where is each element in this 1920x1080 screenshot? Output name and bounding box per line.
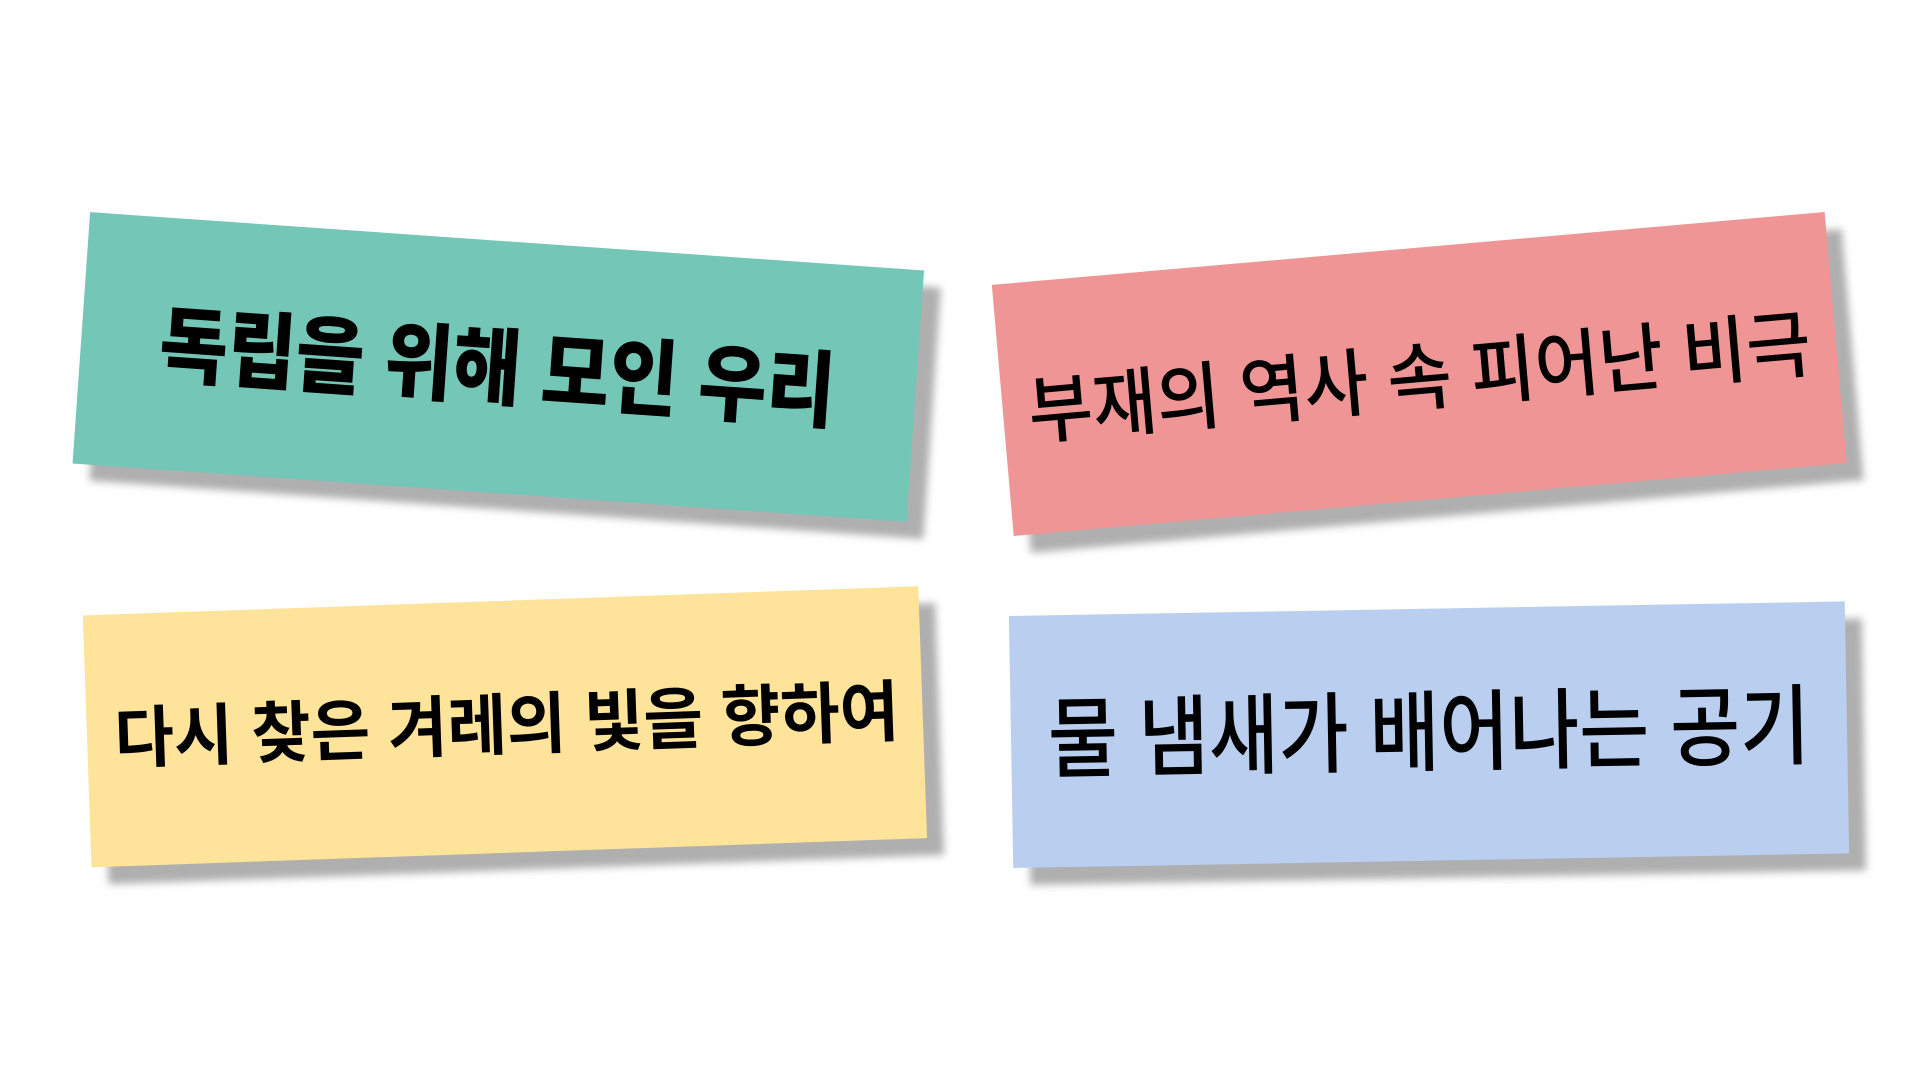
teal note background xyxy=(73,212,924,522)
panel: yellow note xyxy=(83,586,944,885)
teal note text: 독립을 위해 모인 우리 xyxy=(156,298,838,439)
panel: teal note xyxy=(71,212,942,539)
panel: pink note xyxy=(992,211,1864,554)
yellow note text: 다시 찾은 겨레의 빛을 향하여 xyxy=(113,675,900,777)
yellow note background xyxy=(83,586,927,867)
pink note background xyxy=(992,212,1847,536)
blue note background xyxy=(1009,601,1849,868)
panel: blue note xyxy=(1009,601,1866,885)
pink note text: 부재의 역사 속 피어난 비극 xyxy=(1025,303,1814,454)
blue note text: 물 냄새가 배어나는 공기 xyxy=(1047,677,1811,789)
